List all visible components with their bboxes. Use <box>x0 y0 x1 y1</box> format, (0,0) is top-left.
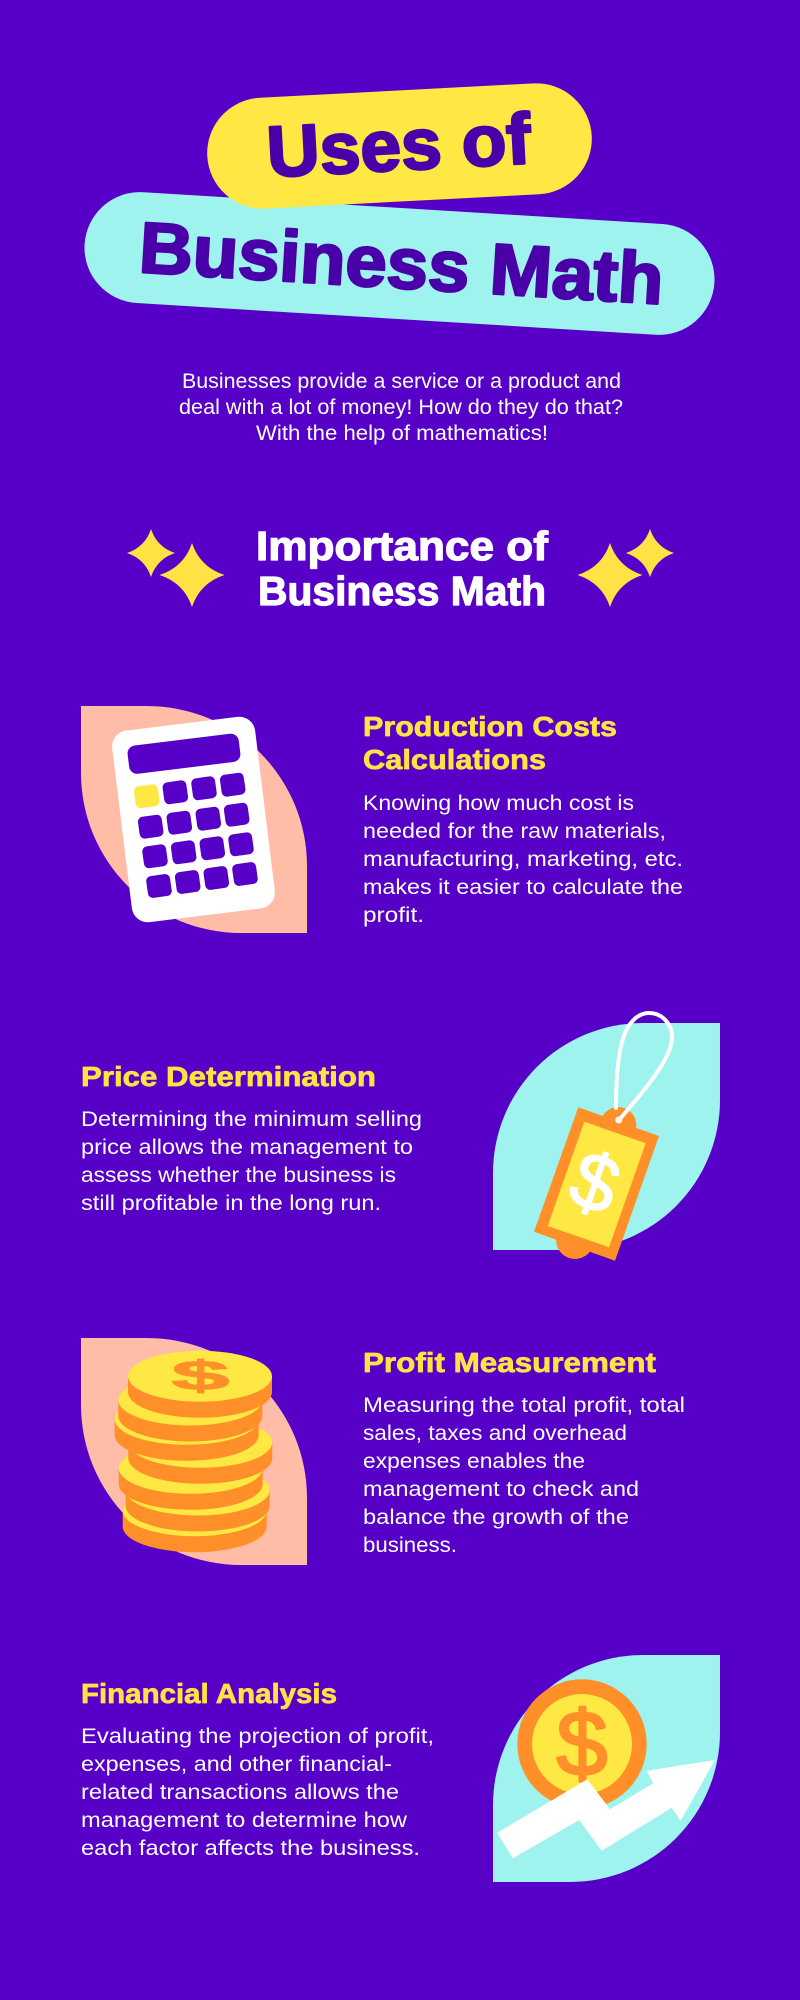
title pill: Business Math <box>81 189 718 338</box>
panel: production costs illustration <box>81 706 307 933</box>
body text: manufacturing, marketing, etc. <box>363 847 683 871</box>
heading: Production Costs <box>363 711 617 742</box>
body text <box>363 791 683 927</box>
intro text <box>179 369 623 445</box>
panel: financial analysis text <box>81 1678 434 1860</box>
body text: Determining the minimum selling <box>81 1107 422 1131</box>
body text <box>81 1724 434 1860</box>
intro text: deal with a lot of money! How do they do that? <box>179 395 623 419</box>
icon: dollar coin: $ <box>556 1693 608 1795</box>
panel: profit measurement text <box>363 1347 685 1557</box>
heading: Profit Measurement <box>363 1347 656 1378</box>
panel: production costs text <box>363 711 683 927</box>
body text: needed for the raw materials, <box>363 819 666 843</box>
body text: price allows the management to <box>81 1135 413 1159</box>
title pill: Uses of <box>204 81 595 211</box>
body text: assess whether the business is <box>81 1163 396 1187</box>
body text: expenses enables the <box>363 1449 585 1473</box>
body text: makes it easier to calculate the <box>363 875 683 899</box>
body text: related transactions allows the <box>81 1780 399 1804</box>
icon: price tag <box>534 1013 672 1261</box>
heading: Financial Analysis <box>81 1678 337 1709</box>
icon: dollar coin <box>517 1679 647 1809</box>
leaf background <box>81 1338 307 1565</box>
body text: still profitable in the long run. <box>81 1191 381 1215</box>
icon: right sparkles <box>578 529 674 607</box>
body text <box>81 1107 422 1215</box>
body text: sales, taxes and overhead <box>363 1421 627 1445</box>
leaf background <box>493 1023 720 1250</box>
title block <box>81 81 718 338</box>
panel: financial analysis illustration <box>493 1655 720 1882</box>
body text: balance the growth of the <box>363 1505 629 1529</box>
section heading: Business Math <box>258 568 546 614</box>
icon: coin stack: $ <box>171 1352 230 1399</box>
icon: left sparkles <box>127 529 224 607</box>
heading: Calculations <box>363 744 546 775</box>
title pill: Uses of: Uses of <box>265 99 534 193</box>
panel: profit measurement illustration <box>81 1338 307 1565</box>
heading: Price Determination <box>81 1061 376 1092</box>
body text: management to determine how <box>81 1808 408 1832</box>
body text: profit. <box>363 903 424 927</box>
body text: business. <box>363 1533 457 1557</box>
arrow: rising trend <box>497 1760 715 1858</box>
intro text: Businesses provide a service or a product and <box>182 369 621 393</box>
body text: Evaluating the projection of profit, <box>81 1724 434 1748</box>
heading <box>363 711 617 775</box>
body text: Measuring the total profit, total <box>363 1393 685 1417</box>
icon: coin stack <box>115 1351 272 1552</box>
body text: expenses, and other financial- <box>81 1752 392 1776</box>
section heading: Importance of <box>256 523 548 569</box>
panel: price determination illustration <box>493 1013 720 1261</box>
intro text: With the help of mathematics! <box>256 421 548 445</box>
body text: management to check and <box>363 1477 639 1501</box>
leaf background <box>81 706 307 933</box>
body text: Knowing how much cost is <box>363 791 634 815</box>
icon: price tag: $ <box>559 1133 631 1232</box>
panel: price determination text <box>81 1061 422 1215</box>
body text <box>363 1393 685 1557</box>
leaf background <box>493 1655 720 1882</box>
title pill: Business Math: Business Math <box>137 208 666 320</box>
body text: each factor affects the business. <box>81 1836 420 1860</box>
icon: calculator <box>110 715 277 924</box>
section heading <box>256 523 548 614</box>
